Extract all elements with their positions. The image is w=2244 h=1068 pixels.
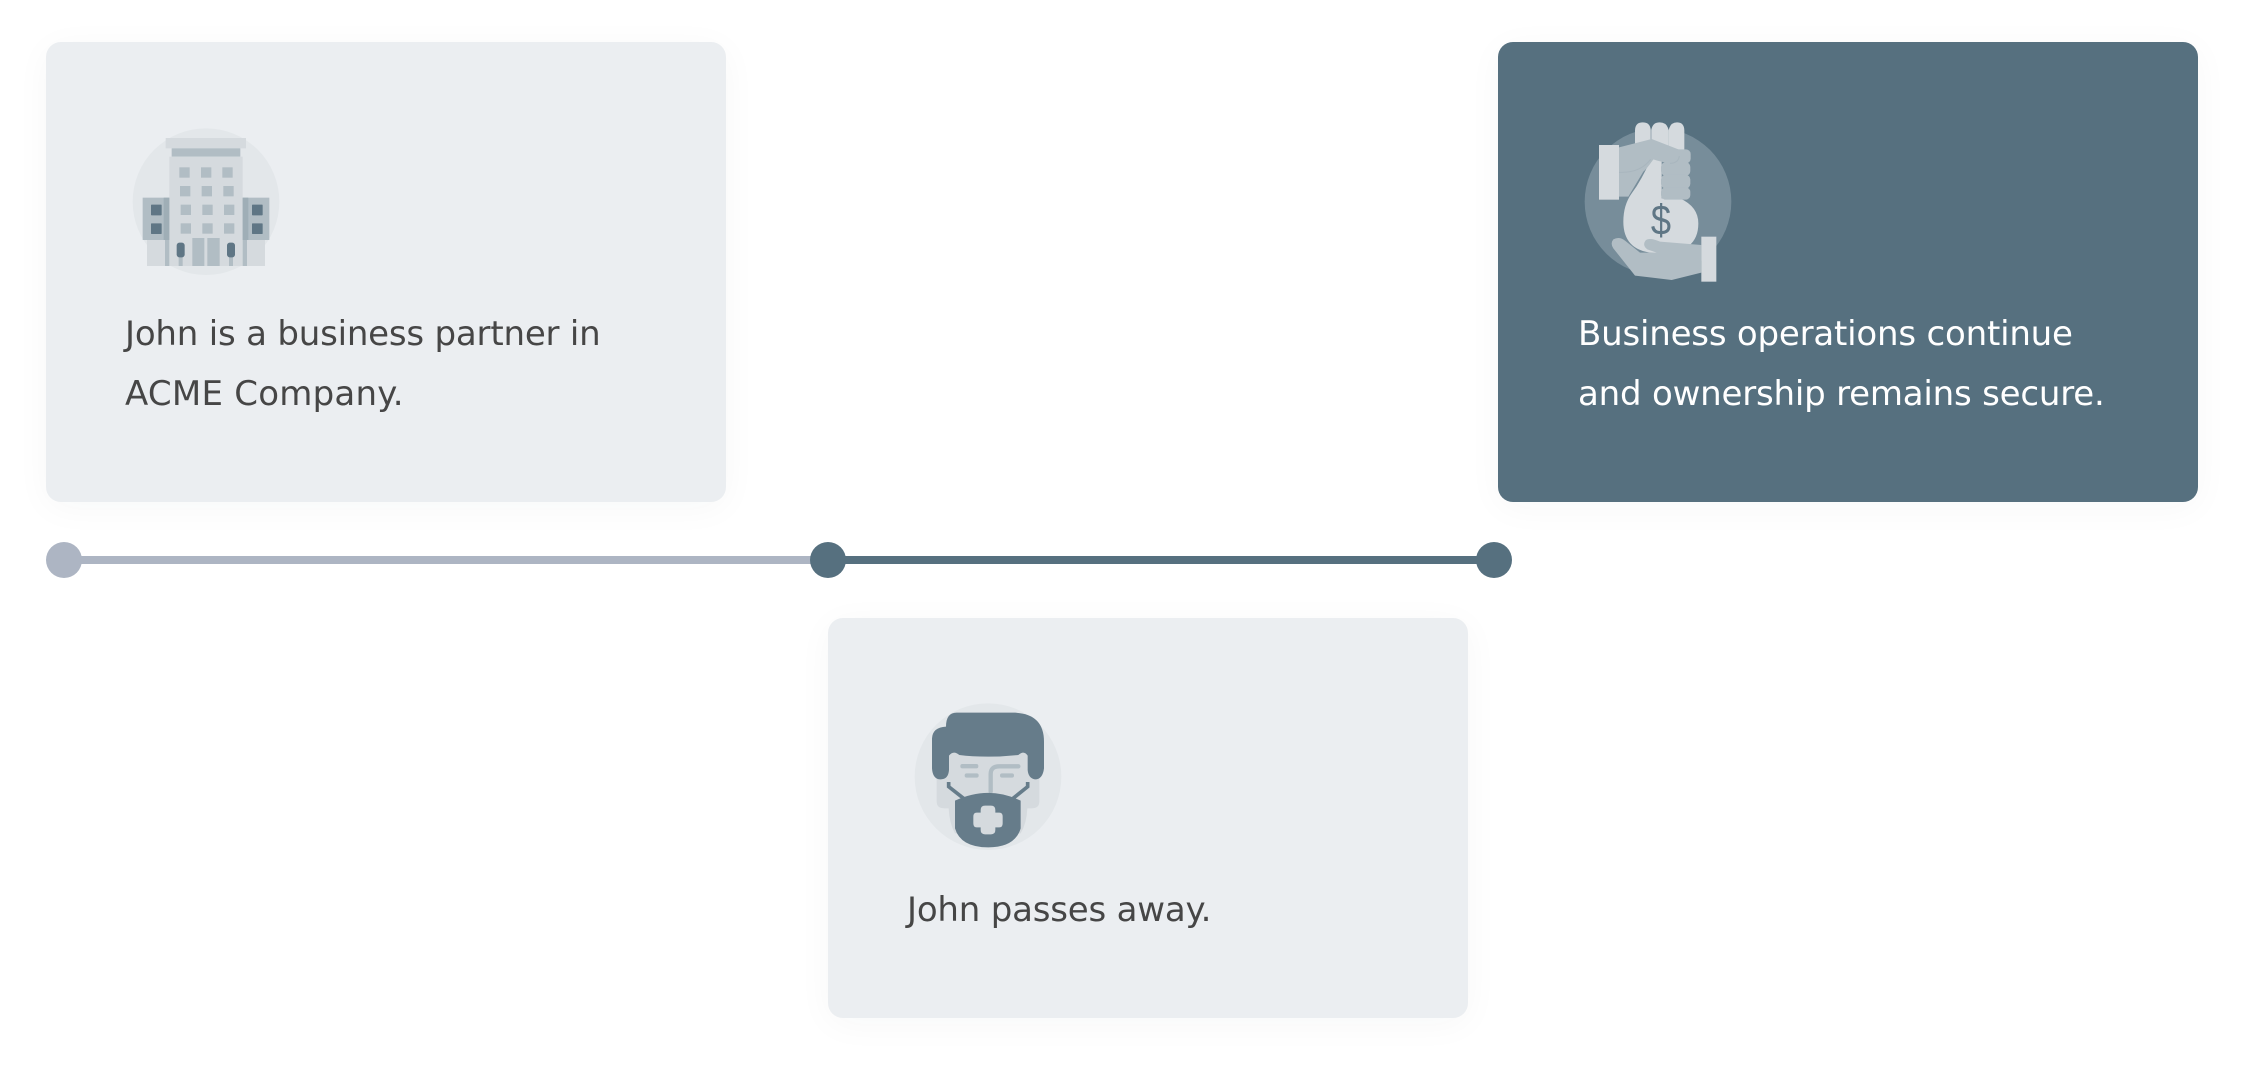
timeline dot: start: [46, 542, 82, 578]
icon: office building: [142, 138, 270, 266]
text: Business operations continue: [1578, 314, 2105, 414]
text: John is a business partner: ACME Company.: [125, 374, 404, 414]
icon: person with medical mask: [932, 712, 1044, 848]
timeline segment: before: [64, 556, 830, 564]
icon glyph: dollar sign: $: [1651, 197, 1671, 244]
timeline dot: end: [1476, 542, 1512, 578]
icon: hands exchanging money bag: [1584, 122, 1732, 282]
panel: Business continues: [1498, 42, 2198, 502]
text: Business operations continue: Business operations continue: [1578, 314, 2073, 354]
timeline: [46, 542, 1512, 578]
text: John is a business partner: John is a business partner in: [125, 314, 601, 354]
timeline segment: after: [828, 556, 1494, 564]
text: Business operations continue: and ownership remains secure.: [1578, 374, 2105, 414]
panel: John is a partner: [46, 42, 726, 502]
timeline dot: middle: [810, 542, 846, 578]
text: John is a business partner: [123, 314, 601, 414]
text: John passes away: John passes away.: [907, 890, 1211, 930]
panel: John passes away: [828, 618, 1468, 1018]
